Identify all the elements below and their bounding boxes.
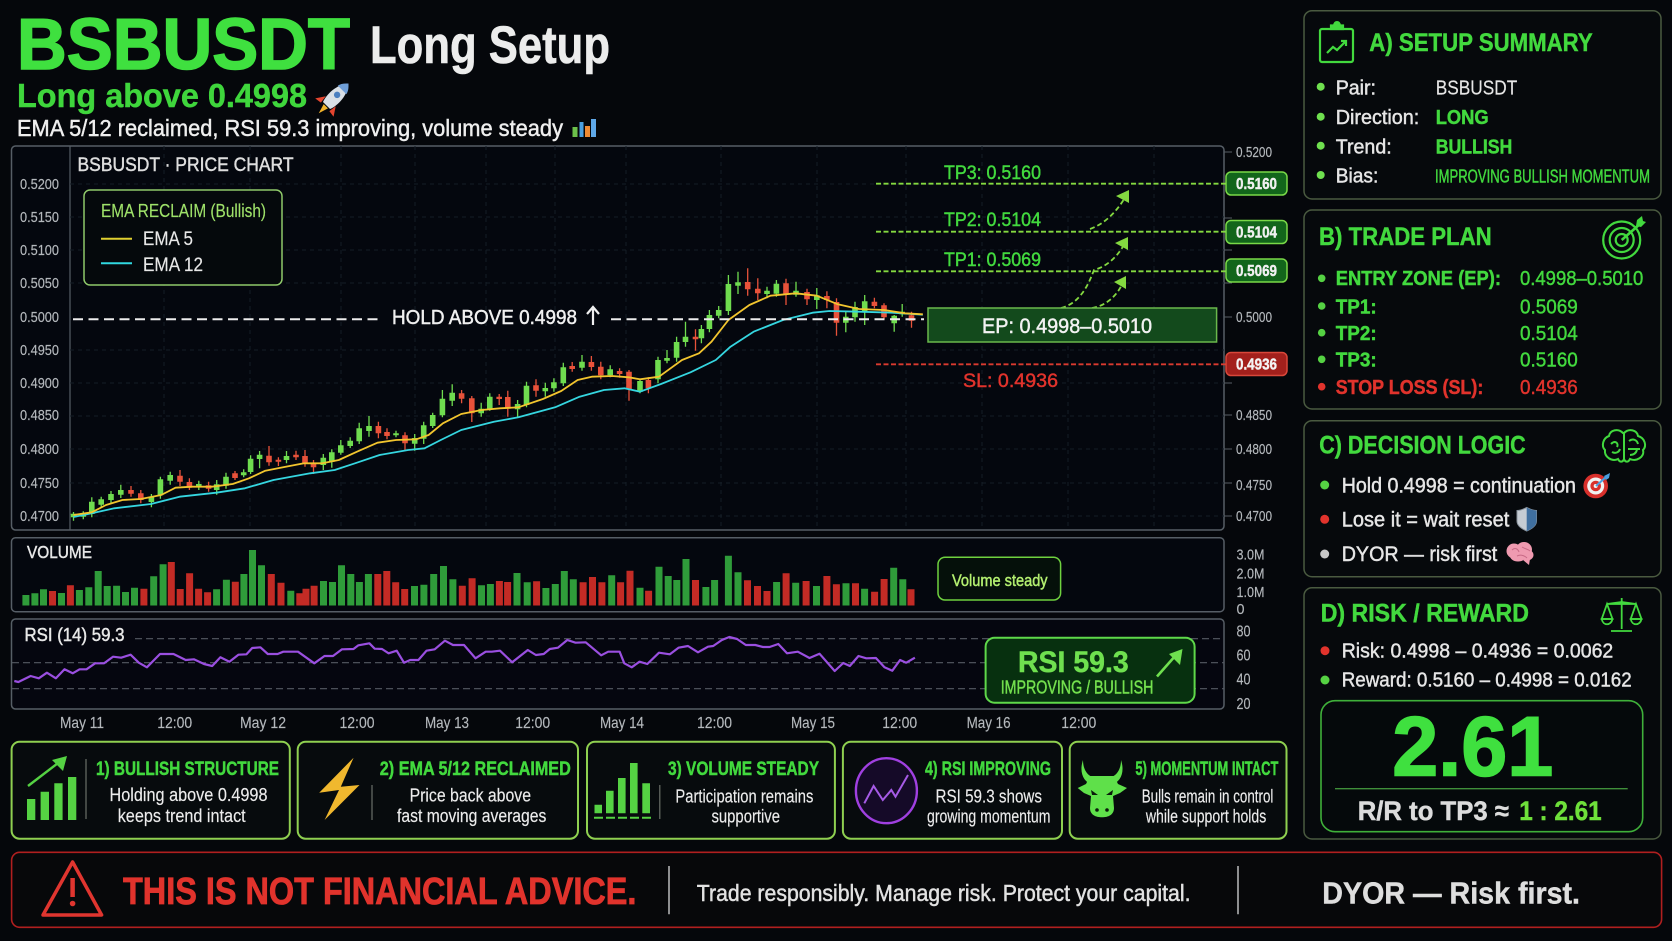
- risk reward rows: [1320, 639, 1632, 692]
- volume heading: VOLUME: [27, 542, 92, 562]
- disclaimer banner: [12, 852, 1662, 927]
- hold above line: [73, 306, 924, 329]
- stop loss level: SL: 0.4936: [963, 370, 1058, 392]
- time axis: May 16: [967, 715, 1011, 732]
- left price axis: 0.5100: [20, 242, 59, 259]
- left price axis: 0.5150: [20, 209, 59, 226]
- target levels: TP1: 0.5069: [944, 250, 1041, 271]
- left price axis: 0.4950: [20, 342, 59, 359]
- legend: EMA reclaim: EMA RECLAIM (Bullish): [101, 201, 266, 221]
- card: EMA reclaimed: 2) EMA 5/12 RECLAIMED: [380, 758, 571, 780]
- panel: price chart: [12, 144, 1287, 530]
- disclaimer banner: THIS IS NOT FINANCIAL ADVICE.: [123, 871, 636, 913]
- time axis: [60, 715, 1096, 732]
- time axis: 12:00: [157, 715, 192, 732]
- right price axis: 0.4750: [1236, 477, 1272, 494]
- volume axis: 2.0M: [1236, 566, 1264, 582]
- volume bars: [26, 550, 911, 606]
- icon: shield: [1517, 508, 1536, 531]
- summary rows: Trend:: [1336, 136, 1392, 158]
- trade plan rows: STOP LOSS (SL):: [1336, 376, 1483, 399]
- RSI axis: [1236, 624, 1251, 713]
- trade plan rows: 0.5069: [1520, 295, 1578, 318]
- icon: lightning bolt: [319, 758, 360, 820]
- RSI callout: [986, 638, 1195, 703]
- entry zone box: EP: 0.4998–0.5010: [982, 315, 1152, 338]
- volume axis: 0: [1236, 601, 1244, 618]
- icon: target: [1603, 216, 1646, 258]
- RSI heading: RSI (14) 59.3: [24, 625, 124, 645]
- volume steady badge: Volume steady: [952, 571, 1048, 590]
- RSI axis: 20: [1236, 696, 1251, 713]
- summary rows: BSBUSDT: [1436, 77, 1517, 99]
- legend: EMA reclaim: EMA 12: [143, 255, 203, 276]
- panel B: trade plan: [1304, 210, 1661, 409]
- card: bullish structure: [12, 742, 290, 839]
- subtitle: long above: Long above 0.4998: [17, 77, 307, 114]
- trade plan rows: 0.4998–0.5010: [1520, 267, 1643, 290]
- logic rows: [1320, 475, 1576, 566]
- right price axis: 0.4800: [1236, 441, 1272, 458]
- logic rows: Lose it = wait reset: [1342, 509, 1509, 532]
- trade plan rows: TP3:: [1336, 349, 1377, 372]
- entry zone box: [928, 308, 1217, 342]
- chart heading: BSBUSDT · PRICE CHART: [78, 154, 294, 176]
- card: momentum intact: 5) MOMENTUM INTACT: [1135, 758, 1278, 780]
- legend: EMA reclaim: EMA 5: [143, 229, 193, 250]
- panel C: decision logic: [1304, 421, 1661, 577]
- card: momentum intact: while support holds: [1145, 807, 1266, 827]
- card: EMA reclaimed: fast moving averages: [397, 806, 546, 826]
- panel: RSI: [12, 619, 1251, 713]
- target levels: TP2: 0.5104: [944, 210, 1041, 231]
- time axis: May 11: [60, 715, 104, 732]
- trade plan rows: 0.5160: [1520, 349, 1578, 372]
- icon: rising bars with arrow: [27, 756, 76, 820]
- card: momentum intact: Bulls remain in control: [1142, 787, 1273, 807]
- volume axis: 3.0M: [1236, 546, 1264, 564]
- RSI axis: 40: [1236, 672, 1251, 688]
- time axis: May 15: [791, 715, 835, 732]
- summary rows: Pair:: [1336, 77, 1376, 99]
- time axis: 12:00: [340, 715, 375, 732]
- price tags: 0.5160: [1236, 176, 1277, 193]
- RSI line: [14, 637, 915, 682]
- ratio callout: 1 : 2.61: [1519, 796, 1602, 826]
- trade plan rows: 0.5104: [1520, 322, 1578, 345]
- time axis: 12:00: [697, 715, 732, 732]
- left price axis: 0.4900: [20, 375, 59, 392]
- trade plan rows: TP2:: [1336, 322, 1377, 345]
- logic rows: DYOR — risk first: [1342, 543, 1497, 566]
- RSI callout: IMPROVING / BULLISH: [1001, 678, 1153, 698]
- summary rows: BULLISH: [1436, 136, 1512, 158]
- title: BSBUSDT: [17, 5, 350, 85]
- panel: volume: [12, 538, 1264, 618]
- price tags: 0.4936: [1236, 356, 1277, 374]
- time axis: May 12: [240, 715, 286, 732]
- target levels: [876, 163, 1226, 271]
- disclaimer banner: DYOR — Risk first.: [1322, 876, 1580, 910]
- risk reward rows: Reward: 0.5160 – 0.4998 = 0.0162: [1342, 669, 1632, 692]
- card: RSI improving: RSI 59.3 shows: [936, 787, 1042, 807]
- left price axis: 0.5050: [20, 275, 59, 292]
- price tags: 0.5104: [1236, 224, 1277, 242]
- right price axis: 0.4850: [1236, 407, 1272, 424]
- left price axis: 0.4750: [20, 475, 59, 492]
- card: RSI improving: [843, 742, 1062, 839]
- left price axis: 0.5000: [20, 309, 59, 326]
- left price axis: 0.4700: [20, 508, 59, 525]
- summary rows: [1317, 77, 1650, 188]
- icon: clipboard: [1320, 22, 1353, 62]
- right price axis: [1224, 144, 1272, 525]
- panel D: risk reward: [1304, 588, 1661, 839]
- time axis: 12:00: [882, 715, 917, 732]
- summary rows: LONG: [1436, 107, 1489, 129]
- risk reward rows: Risk: 0.4998 – 0.4936 = 0.0062: [1342, 639, 1613, 662]
- icon: volume bars: [594, 763, 652, 818]
- RSI callout: RSI 59.3: [1018, 646, 1129, 679]
- price tags: 0.5069: [1236, 263, 1277, 280]
- card: volume steady: 3) VOLUME STEADY: [668, 758, 819, 780]
- icon: bar chart emoji: [572, 119, 596, 137]
- target arrows: [1061, 190, 1129, 308]
- card: EMA reclaimed: Price back above: [410, 786, 531, 806]
- left price axis: 0.4800: [20, 441, 59, 458]
- left price axis: 0.5200: [20, 176, 59, 193]
- trade plan rows: 0.4936: [1520, 376, 1578, 399]
- summary rows: Bias:: [1336, 166, 1378, 188]
- hold above line: HOLD ABOVE 0.4998: [392, 306, 577, 329]
- card: bullish structure: Holding above 0.4998: [110, 785, 268, 805]
- panel A: setup summary: [1304, 11, 1661, 199]
- candlesticks: [74, 268, 912, 521]
- card: volume steady: Participation remains: [675, 787, 813, 807]
- right price axis: 0.4700: [1236, 508, 1272, 525]
- EMA 12 line: [74, 311, 923, 517]
- price tags: [1226, 172, 1287, 376]
- time axis: 12:00: [515, 715, 550, 732]
- target levels: TP3: 0.5160: [944, 163, 1041, 184]
- left price axis: [20, 176, 59, 525]
- time axis: May 14: [600, 715, 644, 732]
- card: RSI improving: 4) RSI IMPROVING: [925, 758, 1051, 780]
- volume steady badge: [938, 557, 1061, 600]
- legend: EMA reclaim: [84, 190, 282, 285]
- card: RSI improving: growing momentum: [927, 807, 1050, 827]
- trade plan rows: [1318, 267, 1643, 399]
- card: bullish structure: 1) BULLISH STRUCTURE: [96, 758, 279, 780]
- RSI axis: 80: [1236, 624, 1251, 640]
- left price axis: 0.4850: [20, 407, 59, 424]
- right price axis: 0.5200: [1236, 144, 1272, 161]
- icon: RSI circle: [856, 758, 917, 823]
- EMA 5 line: [74, 293, 923, 515]
- summary rows: Direction:: [1336, 107, 1419, 129]
- icon: warning triangle: [43, 862, 102, 915]
- ratio callout: R/R to TP3 ≈: [1358, 796, 1509, 826]
- card: momentum intact: [1070, 742, 1286, 839]
- trade plan rows: TP1:: [1336, 295, 1377, 318]
- icon: pink brain: [1506, 542, 1534, 565]
- icon: scales: [1602, 598, 1642, 631]
- title: Long Setup: [370, 16, 610, 75]
- card: bullish structure: keeps trend intact: [118, 806, 246, 826]
- ratio callout: [1321, 700, 1643, 832]
- volume axis: 1.0M: [1236, 584, 1264, 601]
- panel D: risk reward: D) RISK / REWARD: [1321, 600, 1529, 628]
- RSI axis: 60: [1236, 648, 1251, 664]
- icon: target emoji: [1583, 473, 1610, 498]
- panel B: trade plan: B) TRADE PLAN: [1319, 223, 1492, 251]
- card: volume steady: [587, 742, 835, 839]
- right price axis: 0.5000: [1236, 309, 1272, 326]
- disclaimer banner: Trade responsibly. Manage risk. Protect your capital.: [697, 880, 1190, 906]
- time axis: 12:00: [1061, 715, 1096, 732]
- icon: bull head: [1078, 760, 1127, 817]
- time axis: May 13: [425, 715, 469, 732]
- title: [17, 5, 610, 85]
- volume axis: [1236, 546, 1264, 618]
- ratio callout: 2.61: [1392, 700, 1553, 794]
- subheading: reasons: EMA 5/12 reclaimed, RSI 59.3 improving, volume steady: [17, 115, 563, 141]
- logic rows: Hold 0.4998 = continuation: [1342, 475, 1576, 498]
- panel C: decision logic: C) DECISION LOGIC: [1319, 431, 1526, 459]
- icon: rocket: [310, 74, 358, 122]
- panel A: setup summary: A) SETUP SUMMARY: [1369, 29, 1593, 57]
- card: EMA reclaimed: [298, 742, 578, 839]
- trade plan rows: ENTRY ZONE (EP):: [1336, 267, 1501, 290]
- card: volume steady: supportive: [712, 807, 780, 827]
- icon: brain outline: [1603, 430, 1645, 462]
